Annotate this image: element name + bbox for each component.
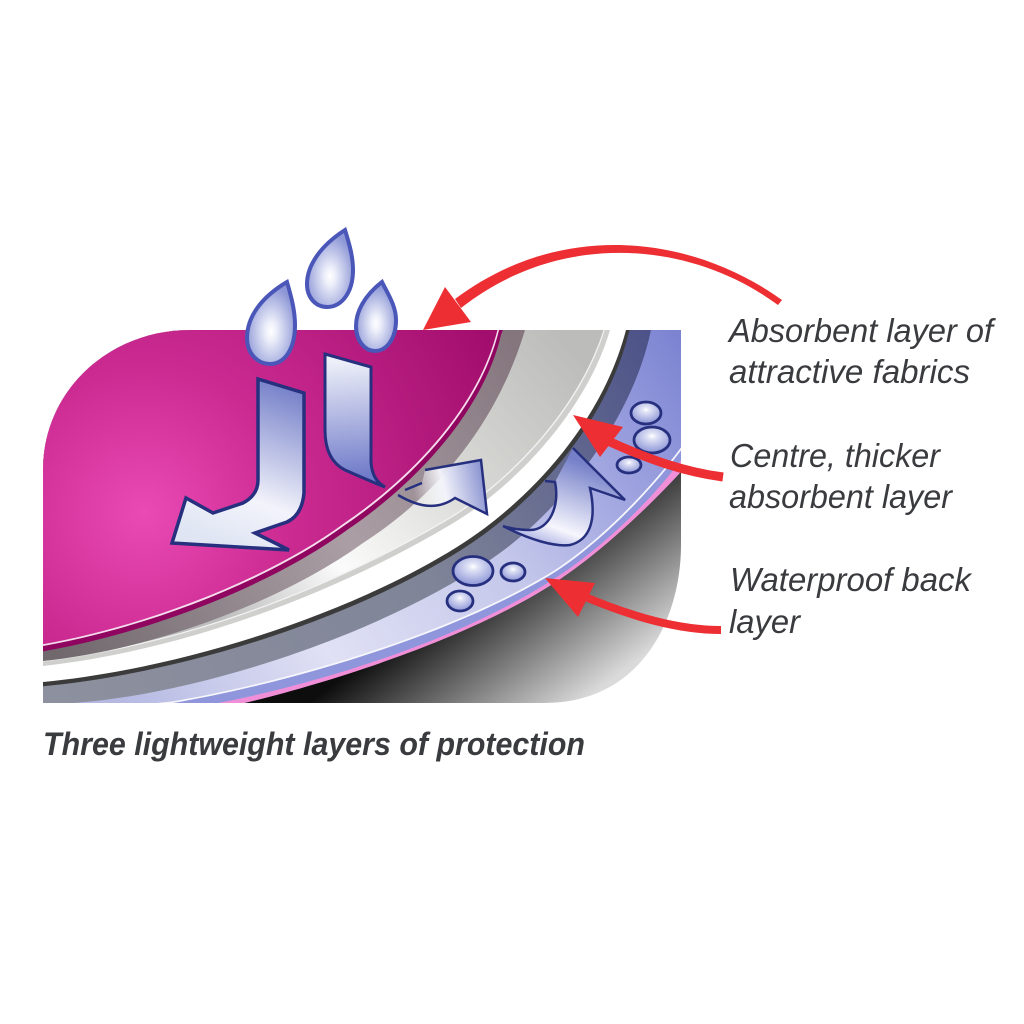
layer: waterproof black back xyxy=(43,330,681,703)
layer: white band xyxy=(43,330,626,682)
layer: periwinkle edge xyxy=(173,450,681,703)
caption: Three lightweight layers of protection xyxy=(43,726,585,762)
red arrow: to absorbent top layer xyxy=(423,245,782,330)
label: absorbent layer xyxy=(727,312,997,390)
label: waterproof layer xyxy=(729,561,972,640)
red arrow: to waterproof back layer xyxy=(545,578,721,630)
layer: magenta absorbent top xyxy=(43,330,498,644)
layer: white hairline on magenta xyxy=(43,330,499,646)
arrow: wicking down second arrow xyxy=(325,354,385,487)
arrow: moving through centre layer xyxy=(398,460,487,514)
layer: white hairline xyxy=(157,448,681,703)
layer: pink edge xyxy=(218,460,681,703)
layer: lavender waterproof membrane xyxy=(74,330,681,703)
layer: taupe shadow xyxy=(43,330,525,661)
droplet: top xyxy=(307,230,353,307)
droplet: left xyxy=(247,282,295,364)
label: absorbent layer: attractive fabrics xyxy=(729,353,970,390)
label: absorbent layer: Absorbent layer of xyxy=(727,312,997,349)
layer: dark magenta edge xyxy=(43,330,503,652)
infographic: three layers of protection xyxy=(43,226,996,762)
layer: grey-blue shadow band xyxy=(43,330,651,703)
droplet: right xyxy=(356,282,396,351)
layer: dark line xyxy=(43,330,630,686)
layer: silver centre absorbent xyxy=(128,330,604,646)
layer: thin white line on silver xyxy=(43,330,605,662)
label: centre layer xyxy=(729,437,954,515)
moisture bubbles xyxy=(447,402,670,611)
red arrow: to centre layer xyxy=(573,415,723,477)
arrow: wicking down J arrow xyxy=(172,379,304,550)
arrow: stopped at waterproof layer xyxy=(503,448,625,545)
label: centre layer: absorbent layer xyxy=(729,478,954,515)
label: centre layer: Centre, thicker xyxy=(730,437,942,474)
label: waterproof layer: Waterproof back xyxy=(730,561,972,598)
layer: light grey edge xyxy=(43,330,610,666)
diagram: fabric layers xyxy=(43,330,681,703)
label: waterproof layer: layer xyxy=(729,603,802,640)
